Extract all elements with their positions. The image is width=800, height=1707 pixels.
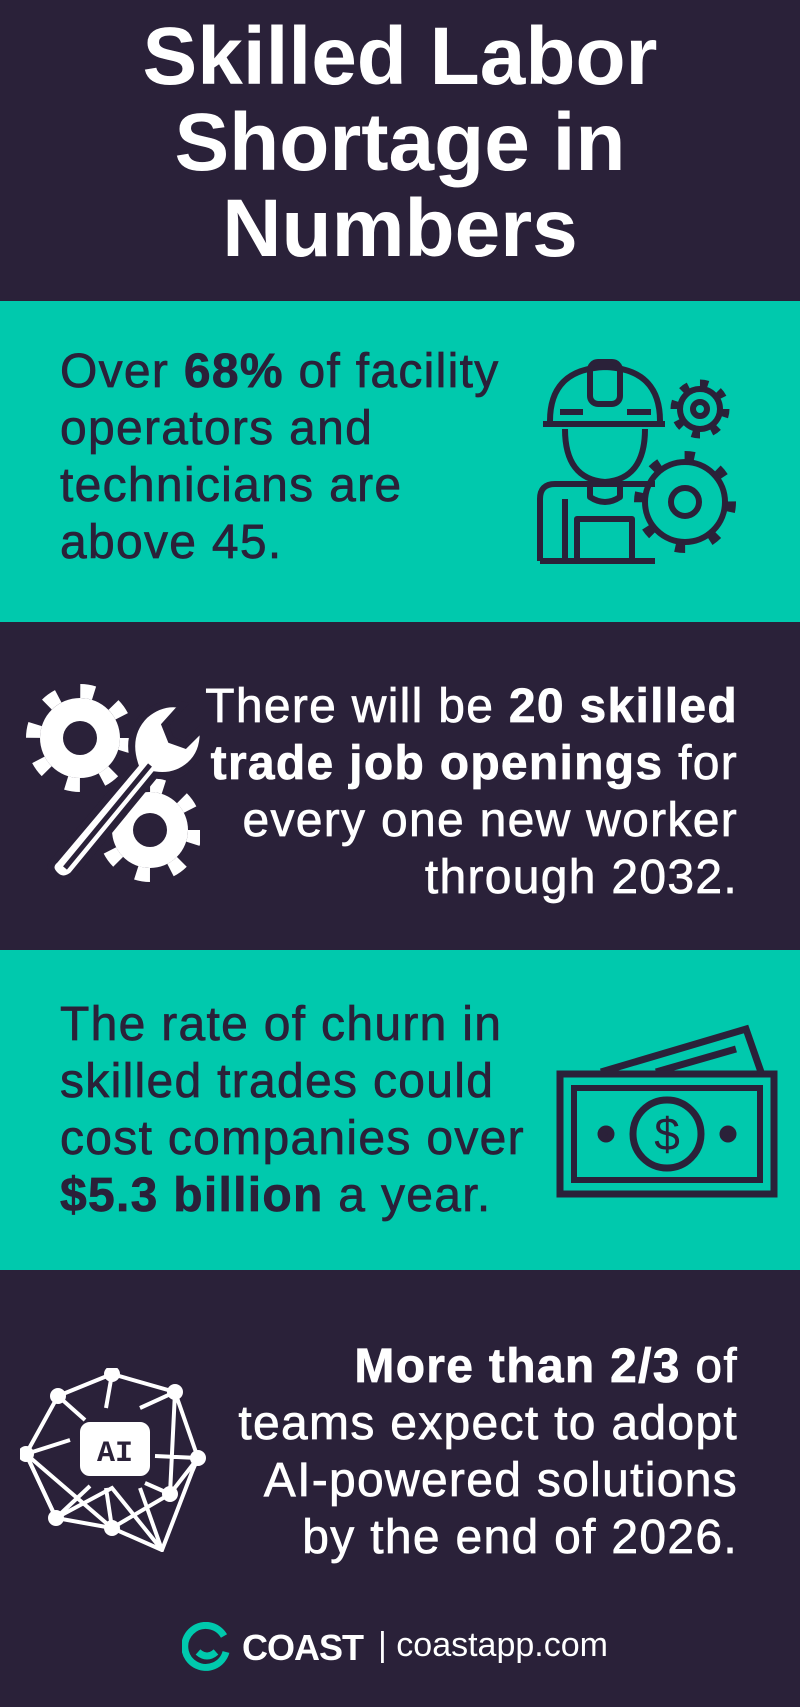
text: AI adoption: teams expect to adopt <box>238 1397 738 1450</box>
text: age stat: above 45. <box>60 516 283 569</box>
text: job openings: trade job openings for <box>211 737 738 790</box>
logo text: COAST <box>242 1627 363 1668</box>
url: | coastapp.com <box>378 1626 608 1664</box>
title <box>143 11 657 274</box>
text: AI adoption <box>238 1340 738 1564</box>
icon: worker with gears <box>537 359 736 564</box>
icon: coast logo <box>182 1622 230 1671</box>
text: AI adoption: by the end of 2026. <box>302 1511 738 1564</box>
icon: AI brain network <box>20 1368 206 1552</box>
text: job openings: every one new worker <box>242 794 738 847</box>
icon: wrench and gear <box>26 684 200 882</box>
text: churn cost: skilled trades could <box>60 1055 494 1108</box>
footer: logo and url <box>182 1622 608 1671</box>
text: job openings: There will be 20 skilled <box>205 680 738 733</box>
panel: AI adoption stat <box>20 1340 738 1671</box>
icon: money bill: $ <box>654 1108 680 1160</box>
title: Skilled Labor <box>143 11 657 102</box>
panel: churn cost stat <box>0 950 800 1270</box>
icon: AI brain network: AI <box>97 1437 133 1471</box>
icon: money bill <box>556 1024 778 1198</box>
panel: job openings stat <box>26 680 738 904</box>
title: Numbers <box>222 183 578 274</box>
text: age stat: technicians are <box>60 459 402 512</box>
text: age stat: Over 68% of facility <box>60 345 500 398</box>
text: AI adoption: AI-powered solutions <box>264 1454 738 1507</box>
text: churn cost: The rate of churn in <box>60 998 502 1051</box>
text: job openings <box>205 680 738 904</box>
title: Shortage in <box>174 97 626 188</box>
text: job openings: through 2032. <box>425 851 738 904</box>
text: churn cost: $5.3 billion a year. <box>60 1169 492 1222</box>
text: churn cost: cost companies over <box>60 1112 525 1165</box>
text: age stat <box>60 345 500 569</box>
panel: age stat <box>0 301 800 622</box>
text: AI adoption: More than 2/3 of <box>354 1340 738 1393</box>
text: churn cost <box>60 998 525 1222</box>
text: age stat: operators and <box>60 402 373 455</box>
